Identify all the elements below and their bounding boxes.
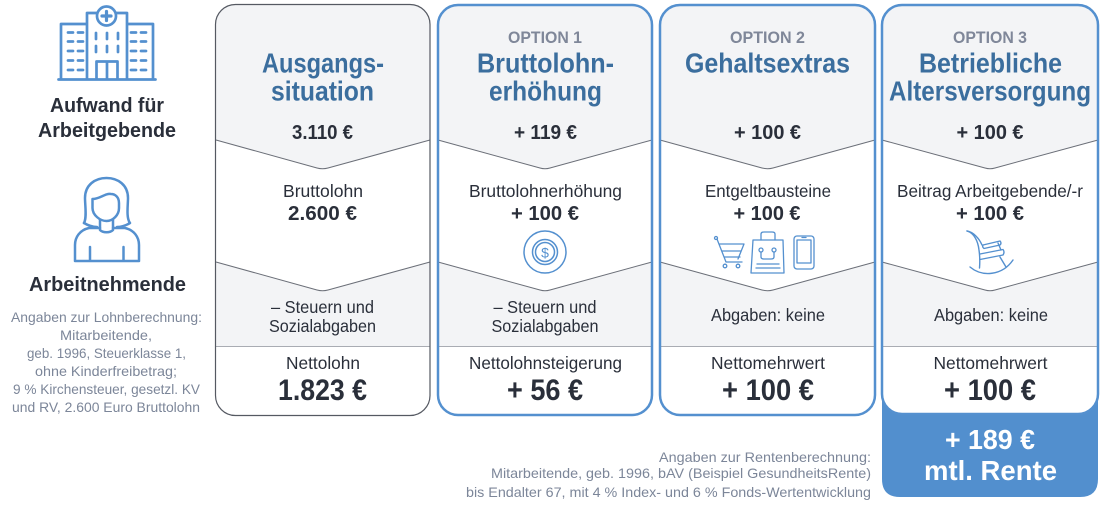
heading: Betriebliche Altersversorgung: [889, 48, 1091, 106]
text: wage calculation note: ohne Kinderfreibetrag;: [35, 363, 177, 379]
text: net value: + 100 €: [722, 374, 814, 407]
heading: Bruttolohnerhöhung: [477, 48, 614, 106]
text: net value: [934, 353, 1048, 407]
text: net value: Nettomehrwert: [711, 353, 825, 373]
text: gross salary: Bruttolohn: [283, 181, 363, 201]
text: wage calculation note: und RV, 2.600 Euro Bruttolohn: [12, 399, 200, 415]
heading: Aufwand für Arbeitgebende: Aufwand für: [50, 94, 164, 117]
text: employer contribution: Beitrag Arbeitgebende/-r: [897, 181, 1083, 201]
text: pension calculation note: bis Endalter 67, mit 4 % Index- und 6 % Fonds-Wertentwicklung: [466, 484, 871, 500]
text: pension calculation note: Angaben zur Rentenberechnung:: [659, 449, 871, 465]
text: employer contribution: [897, 181, 1083, 225]
text: net raise: Nettolohnsteigerung: [469, 353, 622, 373]
icon: coin: [524, 231, 566, 273]
text: pension calculation note: Mitarbeitende, geb. 1996, bAV (Beispiel GesundheitsRente): [491, 465, 871, 481]
text: gross salary: 2.600 €: [288, 202, 358, 225]
heading: Bruttolohnerhöhung: erhöhung: [489, 76, 602, 106]
label: Option 2: OPTION 2: [730, 29, 805, 47]
heading: Gehaltsextras: Gehaltsextras: [685, 48, 850, 78]
label: Option 1: OPTION 1: [508, 29, 582, 47]
text: deductions: Sozialabgaben: [492, 316, 598, 336]
text: salary components: + 100 €: [734, 202, 801, 225]
value: employer cost: + 119 €: [514, 121, 578, 144]
icon: employee: [75, 178, 139, 261]
text: net raise: + 56 €: [507, 374, 583, 407]
text: net salary: [278, 353, 367, 407]
text: gross raise: + 100 €: [511, 202, 580, 225]
callout: monthly pension: mtl. Rente: [924, 455, 1057, 486]
panel: Option 3: [882, 5, 1098, 497]
value: employer cost: 3.110 €: [292, 121, 354, 144]
heading: Aufwand für Arbeitgebende: Arbeitgebende: [38, 119, 176, 142]
icon: smartphone: [794, 236, 814, 269]
heading: Aufwand für Arbeitgebende: [38, 94, 176, 142]
callout: monthly pension: [882, 380, 1098, 497]
text: salary components: [705, 181, 831, 225]
text: wage calculation note: [11, 309, 202, 415]
text: deductions: – Steuern und: [271, 297, 374, 317]
heading: Arbeitnehmende: Arbeitnehmende: [29, 273, 186, 296]
text: net salary: 1.823 €: [278, 374, 367, 407]
text: gross raise: [469, 181, 622, 225]
heading: Betriebliche Altersversorgung: Betriebliche: [919, 48, 1062, 78]
text: wage calculation note: Mitarbeitende,: [60, 327, 152, 343]
text: deductions: [269, 297, 376, 336]
text: salary components: Entgeltbausteine: [705, 181, 831, 201]
panel: Option 1: [438, 5, 652, 415]
text: wage calculation note: Angaben zur Lohnberechnung:: [11, 309, 202, 325]
text: net value: Nettomehrwert: [934, 353, 1048, 373]
text: deductions: – Steuern und: [494, 297, 596, 317]
value: employer cost: + 100 €: [734, 121, 802, 144]
text: employer contribution: + 100 €: [956, 202, 1025, 225]
icon: rocking chair: [967, 231, 1013, 273]
text: pension calculation note: [466, 449, 871, 500]
heading: Ausgangssituation: situation: [271, 76, 374, 106]
text: wage calculation note: 9 % Kirchensteuer, gesetzl. KV: [13, 381, 201, 397]
text: net salary: Nettolohn: [286, 353, 360, 373]
text: no deductions: Abgaben: keine: [934, 305, 1048, 325]
heading: Bruttolohnerhöhung: Bruttolohn-: [477, 48, 614, 78]
panel: Option 2: [660, 5, 875, 415]
text: deductions: [492, 297, 598, 336]
heading: Ausgangssituation: [262, 48, 384, 106]
text: no deductions: Abgaben: keine: [711, 305, 825, 325]
icon: shopping cart: [714, 236, 744, 268]
text: net raise: [469, 353, 622, 407]
label: Option 3: OPTION 3: [953, 29, 1027, 47]
text: net value: [711, 353, 825, 407]
text: gross salary: [283, 181, 363, 225]
text: wage calculation note: geb. 1996, Steuerklasse 1,: [27, 345, 186, 361]
text: gross raise: Bruttolohnerhöhung: [469, 181, 622, 201]
icon: shopping bag: [751, 232, 784, 273]
text: net value: + 100 €: [944, 374, 1036, 407]
value: employer cost: + 100 €: [956, 121, 1024, 144]
heading: Ausgangssituation: Ausgangs-: [262, 48, 384, 78]
icon: hospital: [58, 6, 156, 80]
icon: coin: $: [541, 244, 549, 260]
panel: Ausgangssituation: [216, 4, 430, 416]
callout: monthly pension: + 189 €: [945, 424, 1035, 455]
text: deductions: Sozialabgaben: [269, 316, 376, 336]
